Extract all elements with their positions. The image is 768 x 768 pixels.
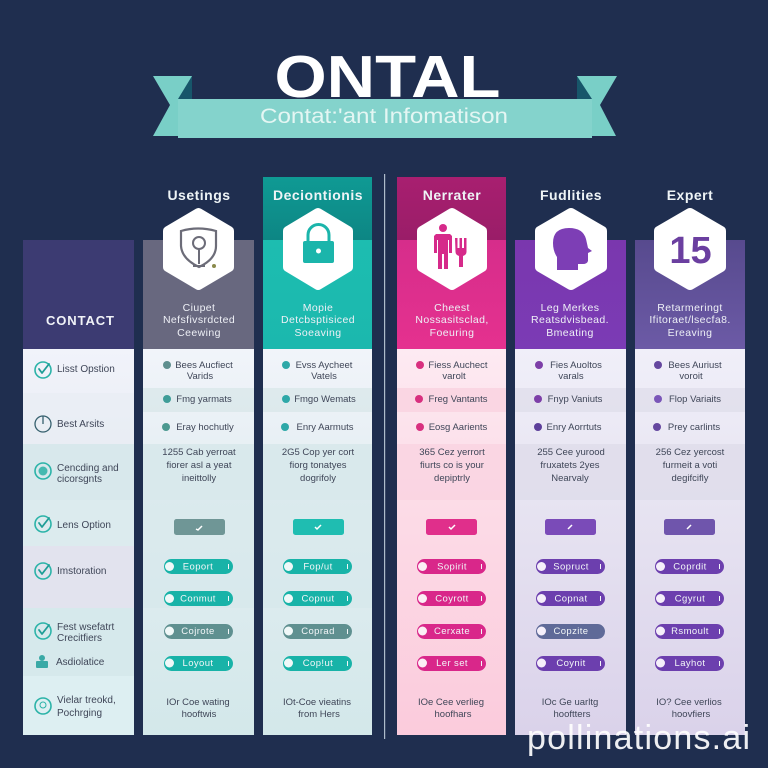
heading: Usetings: [167, 187, 231, 203]
icon: check: [35, 623, 51, 639]
pill buttons: Copnat: [554, 594, 588, 604]
panel: contact labels: Imstoration: [57, 566, 106, 577]
feature rows: [281, 360, 356, 484]
icon: check: [35, 563, 51, 579]
icon: check: [35, 516, 51, 532]
heading: Expert: [667, 187, 713, 203]
feature rows: Fmg yarmats: [176, 394, 232, 405]
icon: hexagon shield: [168, 213, 229, 285]
feature rows: dogrifoly: [300, 473, 336, 484]
panel: contact labels: Cencding and: [57, 463, 119, 474]
footer note: IOe Cee verlieg: [418, 697, 484, 708]
feature rows: 365 Cez yerrort: [419, 447, 485, 458]
feature rows: [534, 360, 605, 484]
icon: people: [36, 655, 48, 668]
footer note: IO? Cee verlios: [656, 697, 722, 708]
description: [281, 302, 355, 339]
feature rows: ineittolly: [182, 473, 216, 484]
description: Foeuring: [430, 327, 474, 339]
description: Retarmeringt: [657, 302, 723, 314]
pill buttons: Cop!ut: [303, 658, 333, 669]
description: Nossasitsclad,: [415, 314, 489, 326]
pill buttons: [536, 559, 605, 671]
description: [415, 302, 489, 339]
description: Soeaving: [295, 327, 341, 339]
pill buttons: Rsmoult: [671, 626, 709, 637]
icon: hexagon padlock: [288, 213, 348, 285]
feature rows: fruxatets 2yes: [540, 460, 600, 471]
footer note: hoovfiers: [672, 709, 711, 720]
feature rows: 256 Cez yercost: [656, 447, 725, 458]
footer note: IOc Ge uarltg: [542, 697, 598, 708]
feature rows: furmeit a voti: [663, 460, 717, 471]
button: [174, 519, 225, 535]
center divider line: [384, 174, 385, 739]
pill buttons: Coyrott: [435, 594, 469, 604]
feature rows: fiorg tonatyes: [289, 460, 347, 471]
pill buttons: [164, 559, 233, 671]
button: [293, 519, 344, 535]
feature rows: Prey carlints: [668, 422, 720, 433]
panel: contact labels: Lisst Opstion: [57, 364, 115, 375]
feature rows: Flop Variaits: [669, 394, 721, 405]
feature rows: Enry Aorrtuts: [547, 422, 602, 433]
footer note: IOr Coe wating: [166, 697, 230, 708]
icon: tag: [35, 698, 51, 714]
icon: check: [35, 362, 51, 378]
heading: Nerrater: [423, 187, 481, 203]
feature rows: Eosg Aarients: [429, 422, 488, 433]
description: Bmeating: [546, 327, 594, 339]
panel: contact labels: Crecitfiers: [57, 633, 102, 644]
footer note: [166, 697, 230, 720]
pill buttons: [283, 559, 352, 671]
icon: chat badge: [35, 463, 51, 479]
feature rows: voroit: [679, 371, 703, 382]
feature rows: varolt: [442, 371, 466, 382]
panel: contact labels: Pochrging: [57, 708, 102, 719]
watermark: pollinations.ai: [527, 719, 750, 757]
description: Leg Merkes: [541, 302, 599, 314]
footer note: from Hers: [298, 709, 340, 720]
footer note: hoofhars: [435, 709, 472, 720]
feature rows: Varids: [187, 371, 213, 382]
footer note: hooftwis: [182, 709, 217, 720]
panel: contact labels: [23, 240, 134, 735]
feature rows: Freg Vantants: [429, 394, 488, 405]
pill buttons: Fop/ut: [303, 562, 333, 572]
feature rows: Fies Auoltos: [550, 360, 602, 371]
panel: contact labels: cicorsgnts: [57, 474, 102, 485]
pill buttons: Sopruct: [553, 562, 589, 572]
description: Cheest: [434, 302, 470, 314]
button: [426, 519, 477, 535]
title: ONTAL: [274, 44, 500, 110]
feature rows: Bees Auriust: [668, 360, 722, 371]
footer note: [418, 697, 484, 720]
heading: Deciontionis: [273, 187, 363, 203]
feature rows: Vatels: [311, 371, 337, 382]
footer note: IOt-Coe vieatins: [283, 697, 351, 708]
feature rows: Fiess Auchect: [428, 360, 488, 371]
feature rows: Enry Aarmuts: [296, 422, 354, 433]
pill buttons: [417, 559, 486, 671]
description: Reatsdvisbead.: [531, 314, 609, 326]
feature rows: depiptrly: [434, 473, 470, 484]
ribbon banner: Contat:'ant Infomatison: [260, 105, 508, 128]
feature rows: Nearvaly: [551, 473, 589, 484]
pill buttons: Conmut: [180, 594, 216, 604]
pill buttons: Coprad: [301, 626, 335, 637]
pill buttons: Sopirit: [437, 562, 467, 572]
pill buttons: Eoport: [183, 562, 213, 572]
icon: clock: [35, 416, 51, 432]
pill buttons: Layhot: [675, 658, 705, 669]
description: [531, 302, 609, 339]
icon: hexagon head: [540, 213, 602, 285]
feature rows: Fmgo Wemats: [294, 394, 356, 405]
pill buttons: Coprdit: [673, 562, 707, 572]
feature rows: Bees Aucfiect: [175, 360, 233, 371]
description: Nefsfivsrdcted: [163, 314, 235, 326]
panel: contact labels: Vielar treokd,: [57, 695, 116, 706]
feature rows: [653, 360, 725, 484]
feature rows: Eray hochutly: [176, 422, 234, 433]
pill buttons: Cgyrut: [675, 594, 705, 604]
ribbon banner: [153, 76, 617, 138]
panel: Nerrater: [397, 177, 506, 735]
description: [163, 302, 235, 339]
panel: Usetings: [143, 187, 254, 735]
feature rows: varals: [558, 371, 584, 382]
icon: hexagon number 15: 15: [669, 230, 712, 272]
footer note: [656, 697, 722, 720]
footer note: [542, 697, 598, 720]
panel: contact labels: Fest wsefatrt: [57, 622, 114, 633]
feature rows: [162, 360, 236, 484]
pill buttons: [655, 559, 724, 671]
pill buttons: Coynit: [556, 658, 586, 669]
icon: hexagon number 15: [659, 213, 721, 285]
pill buttons: Cerxate: [434, 626, 470, 637]
panel: Deciontionis: [263, 177, 372, 735]
feature rows: [415, 360, 488, 484]
pill buttons: Copzite: [553, 626, 589, 637]
panel: contact labels: Best Arsits: [57, 419, 104, 430]
panel: Expert: [635, 187, 745, 735]
pill buttons: Copnut: [301, 594, 335, 604]
footer note: hooftters: [554, 709, 591, 720]
feature rows: fiurts co is your: [420, 460, 484, 471]
pill buttons: Loyout: [183, 658, 213, 669]
panel: contact labels: Lens Option: [57, 520, 111, 531]
pill buttons: Cojrote: [181, 626, 215, 637]
description: [649, 302, 731, 339]
panel: Fudlities: [515, 187, 626, 735]
feature rows: 2G5 Cop yer cort: [282, 447, 355, 458]
heading: Fudlities: [540, 187, 602, 203]
description: Ciupet: [183, 302, 215, 314]
button: [545, 519, 596, 535]
footer note: [283, 697, 351, 720]
description: Ceewing: [177, 327, 221, 339]
feature rows: 255 Cee yurood: [537, 447, 605, 458]
feature rows: Evss Aycheet: [296, 360, 353, 371]
icon: hexagon person and fork: [422, 213, 482, 285]
description: Ifitoraet/lsecfa8.: [649, 314, 731, 326]
feature rows: fiorer asl a yeat: [167, 460, 232, 471]
panel: contact labels: CONTACT: [46, 313, 114, 328]
panel: contact labels: Asdiolatice: [56, 657, 105, 668]
description: Ereaving: [668, 327, 712, 339]
feature rows: Fnyp Vaniuts: [548, 394, 603, 405]
description: Mopie: [303, 302, 333, 314]
pill buttons: Ler set: [436, 658, 468, 669]
button: [664, 519, 715, 535]
feature rows: 1255 Cab yerroat: [162, 447, 236, 458]
description: Detcbsptisiced: [281, 314, 355, 326]
feature rows: degifcifly: [672, 473, 709, 484]
